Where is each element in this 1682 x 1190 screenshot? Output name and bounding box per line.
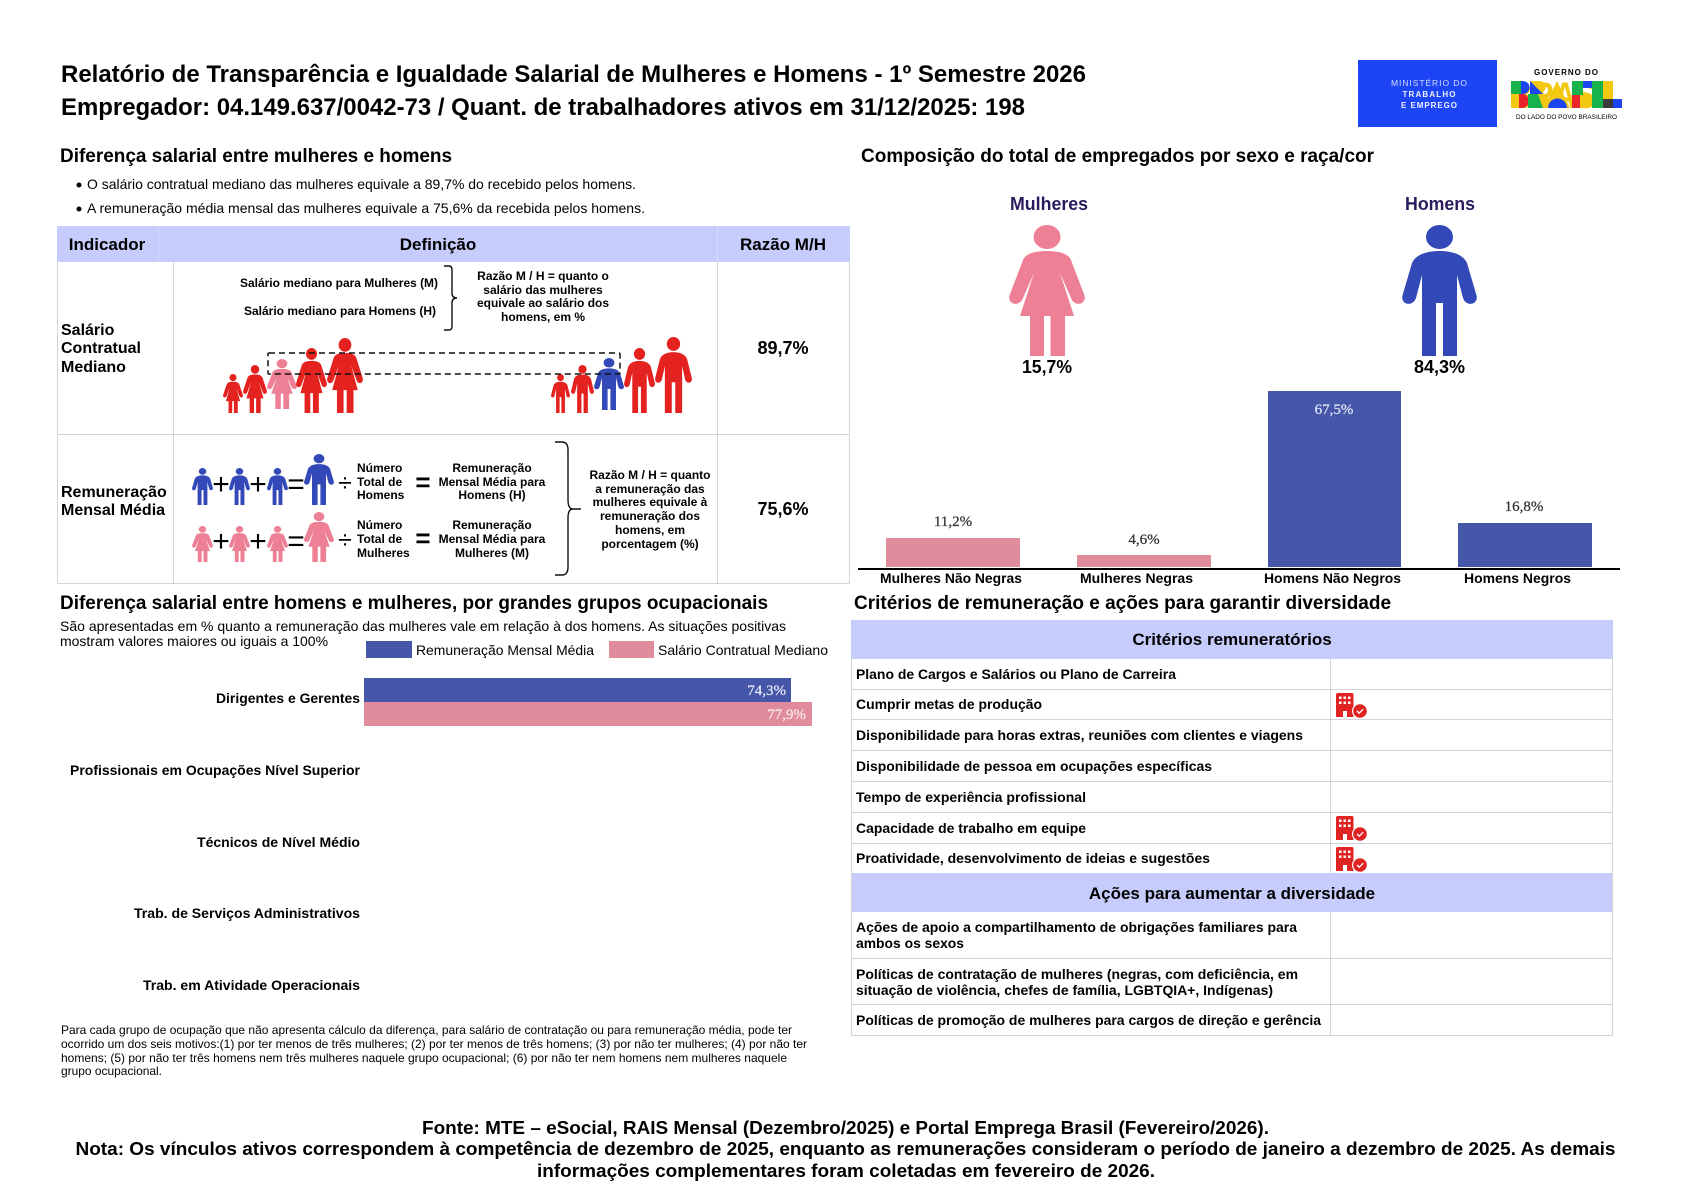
icon: man bbox=[1402, 225, 1477, 356]
occupation labels: Trab. em Atividade Operacionais bbox=[143, 977, 360, 993]
women formula: Remuneração bbox=[452, 518, 532, 532]
footer: fonte e nota: Nota: Os vínculos ativos correspondem à competência de dezembro de 2025, enquanto as remunerações consideram o período de janeiro a dezembro de 2025. As demais bbox=[76, 1138, 1615, 1159]
footer: fonte e nota bbox=[76, 1117, 1615, 1181]
bar: mulheres negras: 4,6% bbox=[1128, 532, 1160, 548]
description: mostram valores maiores ou iguais a 100% bbox=[60, 634, 328, 649]
icon: woman bbox=[1009, 225, 1085, 356]
women formula: = bbox=[287, 525, 305, 558]
action rows: ambos os sexos bbox=[856, 935, 964, 951]
row label: Mediano bbox=[61, 359, 126, 376]
icon: building check, metas bbox=[1336, 693, 1368, 719]
occupation labels: Trab. de Serviços Administrativos bbox=[134, 905, 360, 921]
footnote: ocorrido um dos seis motivos:(1) por ter menos de três mulheres; (2) por ter menos de três homens; (3) por não ter mulheres; (4) por não ter bbox=[61, 1037, 807, 1051]
bar: remuneração 74,3% bbox=[364, 678, 791, 702]
bar: homens não negros bbox=[1268, 391, 1401, 567]
footnote: homens; (5) por não ter três homens nem três mulheres naquele grupo ocupacional; (6) por não ter nem homens nem mulheres naquele bbox=[61, 1051, 787, 1065]
women formula: ÷ bbox=[338, 526, 352, 554]
women share: Mulheres bbox=[1010, 194, 1088, 214]
category labels: Homens Não Negros bbox=[1264, 570, 1401, 586]
criteria rows: Disponibilidade de pessoa em ocupações específicas bbox=[856, 758, 1212, 774]
ratio definition: remuneração dos bbox=[600, 509, 700, 523]
action rows: Políticas de contratação de mulheres (negras, com deficiência, em bbox=[856, 966, 1298, 982]
ratio definition: mulheres equivale à bbox=[593, 495, 708, 509]
bar: homens não negros: 67,5% bbox=[1315, 402, 1353, 418]
footnote: Para cada grupo de ocupação que não apresenta cálculo da diferença, para salário de contratação ou para remuneração média, pode ter bbox=[61, 1023, 792, 1037]
bar: mulheres não negras bbox=[886, 514, 1020, 567]
value: 89,7%: 89,7% bbox=[757, 338, 809, 358]
logo: Ministério do Trabalho e Emprego: TRABALHO bbox=[1402, 90, 1456, 99]
icon: men row bbox=[551, 337, 692, 413]
women formula: + bbox=[249, 525, 267, 558]
occupation labels bbox=[70, 690, 361, 993]
ratio definition: a remuneração das bbox=[595, 482, 705, 496]
logo: Ministério do Trabalho e Emprego: E EMPREGO bbox=[1401, 101, 1457, 110]
row label: Mensal Média bbox=[61, 502, 165, 519]
occupation labels: Técnicos de Nível Médio bbox=[197, 834, 360, 850]
men formula: Remuneração bbox=[452, 461, 532, 475]
women formula: Mensal Média para bbox=[439, 532, 546, 546]
bar: homens negros: 16,8% bbox=[1505, 499, 1543, 515]
men formula: Mensal Média para bbox=[439, 475, 546, 489]
men formula: + bbox=[212, 468, 230, 501]
criteria rows: Capacidade de trabalho em equipe bbox=[856, 820, 1086, 836]
criteria rows: Cumprir metas de produção bbox=[856, 696, 1042, 712]
criteria rows: Plano de Cargos e Salários ou Plano de Carreira bbox=[856, 666, 1176, 682]
logo: Ministério do Trabalho e Emprego bbox=[1358, 60, 1497, 127]
women share bbox=[1009, 194, 1088, 377]
men formula bbox=[192, 454, 546, 505]
men formula: Homens (H) bbox=[458, 488, 526, 502]
row: remuneração mensal média bbox=[61, 442, 809, 575]
heading: diferença salarial: Diferença salarial entre mulheres e homens bbox=[60, 146, 452, 167]
criteria rows bbox=[856, 666, 1303, 866]
men formula: Total de bbox=[357, 475, 402, 489]
logo: Governo do Brasil: GOVERNO DO bbox=[1534, 68, 1598, 77]
men share: 84,3% bbox=[1414, 357, 1465, 377]
description: São apresentadas em % quanto a remuneração das mulheres vale em relação à dos homens. As situações positivas bbox=[60, 619, 786, 634]
title bbox=[61, 61, 1086, 121]
ratio definition: equivale ao salário dos bbox=[477, 296, 609, 310]
action rows: Políticas de promoção de mulheres para cargos de direção e gerência bbox=[856, 1012, 1321, 1028]
bar: salário 77,9% bbox=[364, 702, 812, 726]
women formula: Mulheres (M) bbox=[455, 546, 529, 560]
heading: grupos ocupacionais: Diferença salarial entre homens e mulheres, por grandes grupos ocupacionais bbox=[60, 593, 768, 614]
ratio definition: Razão M / H = quanto bbox=[589, 468, 711, 482]
women formula: Número bbox=[357, 518, 402, 532]
women formula: Mulheres bbox=[357, 546, 410, 560]
logo: Governo do Brasil: DO LADO DO POVO BRASILEIRO bbox=[1516, 114, 1617, 121]
table header: Indicador bbox=[69, 235, 146, 254]
description bbox=[60, 619, 786, 649]
row label: Contratual bbox=[61, 340, 141, 357]
icon: women row bbox=[223, 338, 363, 413]
table header: Definição bbox=[400, 235, 476, 254]
logo: Governo do Brasil bbox=[1511, 68, 1622, 121]
men share: Homens bbox=[1405, 194, 1475, 214]
icon: building check, equipe bbox=[1336, 816, 1368, 842]
men formula: = bbox=[287, 468, 305, 501]
bar: salário 77,9%: 77,9% bbox=[767, 707, 806, 723]
men formula: Homens bbox=[357, 488, 405, 502]
occupation labels: Dirigentes e Gerentes bbox=[216, 690, 360, 706]
women formula bbox=[192, 512, 546, 562]
row label: Remuneração bbox=[61, 484, 167, 501]
women formula: + bbox=[212, 525, 230, 558]
men formula: + bbox=[249, 468, 267, 501]
bar: mulheres não negras: 11,2% bbox=[934, 514, 972, 530]
occupation labels: Profissionais em Ocupações Nível Superior bbox=[70, 762, 361, 778]
ratio definition: salário das mulheres bbox=[483, 283, 603, 297]
ratio definition: homens, em % bbox=[501, 310, 585, 324]
action rows bbox=[856, 919, 1321, 1028]
ratio definition: porcentagem (%) bbox=[601, 537, 699, 551]
table header: Razão M/H bbox=[740, 235, 826, 254]
bullet texts: A remuneração média mensal das mulheres equivale a 75,6% da recebida pelos homens. bbox=[87, 201, 645, 216]
table heading: ações: Ações para aumentar a diversidade bbox=[1089, 884, 1375, 903]
panel: diferença salarial bbox=[57, 146, 850, 584]
table header bbox=[57, 226, 850, 262]
panel: composição bbox=[858, 146, 1620, 586]
title: Empregador: 04.149.637/0042-73 / Quant. de trabalhadores ativos em 31/12/2025: 198 bbox=[61, 94, 1025, 121]
icon: building check, proatividade bbox=[1336, 847, 1368, 873]
ratio definition: Razão M / H = quanto o bbox=[477, 269, 609, 283]
heading: composição: Composição do total de empregados por sexo e raça/cor bbox=[861, 146, 1375, 167]
bullet texts: O salário contratual mediano das mulheres equivale a 89,7% do recebido pelos homens. bbox=[87, 177, 636, 192]
table: critérios bbox=[851, 620, 1613, 1036]
category labels: Homens Negros bbox=[1464, 570, 1571, 586]
men formula: = bbox=[415, 467, 431, 497]
brace bbox=[555, 442, 581, 575]
table heading: critérios remuneratórios: Critérios remuneratórios bbox=[1132, 630, 1332, 649]
legend bbox=[366, 641, 828, 658]
logo: Ministério do Trabalho e Emprego: MINISTÉRIO DO bbox=[1391, 78, 1467, 88]
bar chart: ocupações bbox=[70, 678, 812, 993]
women share: 15,7% bbox=[1022, 357, 1072, 377]
action rows: situação de violência, chefes de família, LGBTQIA+, Indígenas) bbox=[856, 982, 1273, 998]
men formula: Número bbox=[357, 461, 402, 475]
panel: grupos ocupacionais bbox=[60, 593, 828, 1078]
bar chart: sexo e raça bbox=[858, 391, 1620, 586]
row label: Salário bbox=[61, 322, 115, 339]
formula labels: Salário mediano para Mulheres (M) bbox=[240, 276, 438, 290]
women formula: Total de bbox=[357, 532, 402, 546]
footnote: grupo ocupacional. bbox=[61, 1064, 162, 1078]
footer: fonte e nota: informações complementares foram coletadas em fevereiro de 2026. bbox=[537, 1160, 1155, 1181]
value: 75,6%: 75,6% bbox=[757, 499, 809, 519]
criteria rows: Tempo de experiência profissional bbox=[856, 789, 1086, 805]
bar: remuneração 74,3%: 74,3% bbox=[747, 683, 786, 699]
row: salário contratual mediano bbox=[61, 266, 809, 413]
ratio definition: homens, em bbox=[615, 523, 685, 537]
category labels bbox=[880, 570, 1571, 586]
heading: critérios e ações: Critérios de remuneração e ações para garantir diversidade bbox=[854, 593, 1391, 614]
formula labels: Salário mediano para Homens (H) bbox=[244, 304, 436, 318]
median dashed box bbox=[268, 353, 620, 374]
women formula: = bbox=[415, 523, 431, 553]
men share bbox=[1402, 194, 1477, 377]
formula labels bbox=[240, 276, 438, 318]
category labels: Mulheres Negras bbox=[1080, 570, 1193, 586]
criteria rows: Proatividade, desenvolvimento de ideias e sugestões bbox=[856, 850, 1210, 866]
legend: Salário Contratual Mediano bbox=[658, 642, 828, 658]
footnote bbox=[61, 1023, 807, 1078]
footer: fonte e nota: Fonte: MTE – eSocial, RAIS Mensal (Dezembro/2025) e Portal Emprega Brasil (Fevereiro/2026). bbox=[422, 1117, 1269, 1138]
table: indicadores bbox=[57, 226, 850, 584]
logo: Governo do Brasil: BRASIL bbox=[1511, 75, 1622, 116]
title: Relatório de Transparência e Igualdade Salarial de Mulheres e Homens - 1º Semestre 2026 bbox=[61, 61, 1086, 88]
category labels: Mulheres Não Negras bbox=[880, 570, 1022, 586]
criteria rows: Disponibilidade para horas extras, reuniões com clientes e viagens bbox=[856, 727, 1303, 743]
bar: homens negros bbox=[1458, 499, 1592, 567]
men formula: ÷ bbox=[338, 469, 352, 497]
action rows: Ações de apoio a compartilhamento de obrigações familiares para bbox=[856, 919, 1297, 935]
panel: critérios e ações bbox=[851, 593, 1613, 1036]
bar: mulheres negras bbox=[1077, 532, 1211, 567]
brace bbox=[444, 266, 457, 330]
legend: Remuneração Mensal Média bbox=[416, 642, 594, 658]
bullet texts bbox=[76, 177, 645, 216]
